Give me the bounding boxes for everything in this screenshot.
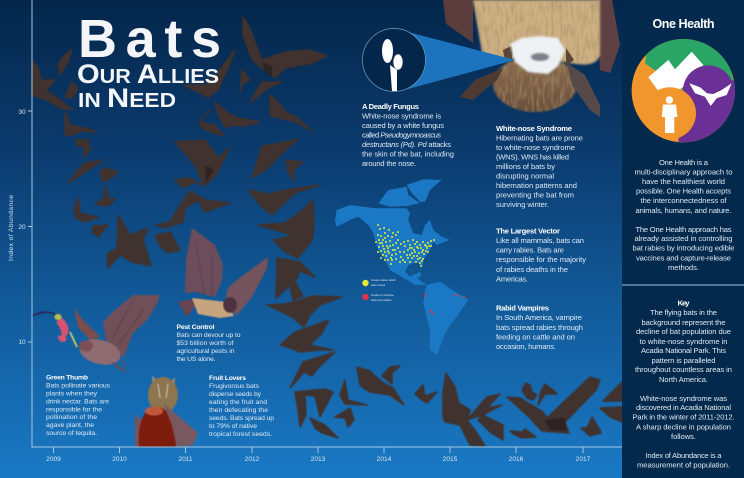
- text: Green Thumb: pollination of the: [46, 414, 97, 421]
- text: One Health description: vaccines and capture-release: [636, 254, 731, 262]
- callout cone to the nose: [408, 32, 515, 89]
- panel: One Health and Key sidebar: [622, 0, 744, 478]
- text: A Deadly Fungus: called Pseudogymnoascus: [362, 130, 441, 140]
- text: One Health description: bat rabies by introducing edible: [632, 244, 734, 252]
- text: Key: follows.: [671, 432, 696, 441]
- text: One Health description: possible. One Health accepts: [636, 186, 731, 196]
- bat: pest control bat: [178, 228, 268, 318]
- red rabies sites: [425, 294, 465, 314]
- flying bats population pattern: [32, 17, 622, 446]
- text: Green Thumb: responsible for the: [46, 406, 102, 414]
- text: Rabid Vampires: Rabid Vampires: [496, 304, 549, 312]
- text: Fruit Lovers: seeds. Bats spread up: [209, 415, 274, 422]
- text: One Health description: have the healthiest world: [642, 177, 725, 186]
- text: Rabid Vampires: feeding on cattle and on: [496, 332, 575, 342]
- x axis year labels: 2011: [178, 456, 193, 463]
- x axis year labels: 2016: [509, 456, 524, 463]
- text: One Health description: methods.: [668, 263, 699, 272]
- text: White-nose Syndrome: Hibernating bats are prone: [496, 134, 583, 142]
- y axis labels: [8, 109, 26, 346]
- title: [77, 9, 221, 113]
- text: Fruit Lovers: eating the fruit and: [209, 399, 267, 406]
- text: Pest Control: [176, 324, 241, 363]
- x axis year labels: 2014: [377, 456, 392, 463]
- map legend: [362, 278, 396, 302]
- text: Fruit Lovers: then defecating the: [209, 407, 268, 414]
- text: One Health description: multi-disciplinary approach to: [634, 168, 732, 176]
- x axis year labels: 2012: [245, 456, 260, 463]
- text: Key: North America.: [659, 375, 708, 384]
- y axis labels: 30: [18, 109, 26, 116]
- text: A Deadly Fungus: destructans (Pd). Pd attacks: [362, 140, 451, 149]
- text: White-nose Syndrome: (WNS). WNS has killed: [496, 152, 569, 162]
- text: White-nose Syndrome: hibernation patterns and: [496, 181, 577, 190]
- text: Fruit Lovers: tropical forest seeds.: [209, 431, 272, 438]
- text: A Deadly Fungus: around the nose.: [362, 159, 416, 168]
- text: Green Thumb: plants when they: [46, 390, 98, 398]
- text: Fruit Lovers: Fruit Lovers: [209, 375, 246, 382]
- text: Green Thumb: source of tequila.: [46, 430, 97, 437]
- text: Key: Key: [678, 298, 690, 308]
- text: Key: Park in the winter of 2011-2012.: [632, 412, 734, 422]
- icon: One Health circle: [632, 39, 735, 142]
- y axis labels: Index of Abundance: [8, 195, 15, 261]
- text: The Largest Vector: carry rabies. Bats are: [496, 246, 564, 254]
- text: A Deadly Fungus: A Deadly Fungus: [362, 102, 419, 111]
- map legend: bats and rabies: [371, 298, 392, 302]
- text: Green Thumb: [46, 374, 111, 437]
- text: One Health description: the interconnectedness of: [640, 196, 727, 205]
- text: Key: to white-nose syndrome in: [640, 337, 728, 346]
- text: Key: pattern is paralleled: [652, 356, 716, 365]
- title: IN NEED: [78, 83, 176, 113]
- text: One Health description: animals, humans, and nature.: [636, 206, 732, 215]
- text: A Deadly Fungus: White-nose syndrome is: [362, 112, 441, 120]
- x axis year labels: 2013: [311, 456, 326, 463]
- text: Key: A sharp decline in population: [636, 422, 731, 432]
- heading: One Health: One Health: [652, 17, 714, 31]
- text: Pest Control: Pest Control: [176, 324, 215, 331]
- text: Key: [632, 298, 734, 470]
- x axis year labels: 2009: [46, 456, 61, 463]
- text: White-nose Syndrome: preventing the bat from: [496, 190, 574, 200]
- text: Rabid Vampires: occasion, humans.: [496, 342, 556, 351]
- y axis labels: 20: [18, 224, 26, 231]
- map legend: Areas of vampire: [371, 293, 394, 297]
- text: Fruit Lovers: Frugivorous bats: [209, 383, 260, 390]
- title: OUR ALLIES: [77, 59, 219, 89]
- text: Key: Acadia National Park. This: [641, 346, 726, 355]
- large bat face with white nose: [443, 0, 620, 117]
- text: White-nose Syndrome: to white-nose syndrome: [496, 143, 575, 152]
- text: Pest Control: agricultural pests in: [176, 348, 235, 355]
- text: A Deadly Fungus: the skin of the bat, including: [362, 150, 454, 158]
- axes: [28, 0, 622, 453]
- x axis year labels: 2015: [443, 456, 458, 463]
- text: White-nose Syndrome: White-nose Syndrome: [496, 124, 572, 133]
- text: Key: throughout countless areas in: [635, 365, 732, 374]
- text: The Largest Vector: responsible for the majority: [496, 255, 586, 264]
- text: White-nose Syndrome: surviving winter.: [496, 200, 549, 209]
- text: Key: White-nose syndrome was: [640, 394, 727, 403]
- fungus spore icon: [362, 28, 426, 92]
- text: Key: The flying bats in the: [650, 308, 717, 317]
- text: Green Thumb: Green Thumb: [46, 374, 88, 382]
- text: Rabid Vampires: bats spread rabies through: [496, 323, 583, 332]
- text: Key: decline of bat population due: [636, 327, 731, 336]
- text: White-nose Syndrome: millions of bats by: [496, 162, 555, 171]
- text: One Health description: already assisted in controlling: [634, 234, 732, 243]
- map legend: Areas where rabid: [371, 278, 396, 282]
- text: Green Thumb: agave plant, the: [46, 422, 94, 429]
- text: Rabid Vampires: In South America, vampire: [496, 313, 582, 322]
- text: Fruit Lovers: to 79% of native: [209, 423, 257, 430]
- text: The Largest Vector: Like all mammals, bats can: [496, 236, 584, 245]
- text: The Largest Vector: of rabies deaths in the: [496, 265, 568, 274]
- text: Pest Control: the US alone.: [176, 356, 216, 363]
- x axis year labels: 2010: [112, 456, 127, 463]
- text: The Largest Vector: Americas.: [496, 274, 528, 284]
- yellow rabies sites: [376, 225, 434, 266]
- text: One Health description: [632, 158, 734, 272]
- text: A Deadly Fungus: [362, 102, 454, 168]
- text: Key: Index of Abundance is a: [646, 451, 722, 460]
- bat: nectar-feeding bat with flower: [32, 295, 159, 372]
- text: Fruit Lovers: disperse seeds by: [209, 391, 262, 398]
- bat: fruit bat holding a fruit: [135, 375, 198, 447]
- text: Green Thumb: Bats pollinate various: [46, 382, 111, 390]
- text: The Largest Vector: The Largest Vector: [496, 226, 560, 236]
- text: The Largest Vector: [496, 226, 586, 284]
- title: Bats: [78, 9, 221, 69]
- map of the Americas: [335, 179, 468, 355]
- text: Key: background represent the: [642, 318, 726, 327]
- y axis labels: 10: [18, 339, 26, 346]
- text: Rabid Vampires: [496, 304, 583, 351]
- map legend: bats found: [371, 283, 385, 287]
- text: Key: measurement of population.: [637, 460, 730, 470]
- text: Key: discovered in Acadia National: [636, 403, 731, 412]
- text: Pest Control: Bats can devour up to: [176, 332, 241, 339]
- text: A Deadly Fungus: caused by a white fungus: [362, 121, 444, 130]
- text: Pest Control: $53 billion worth of: [176, 340, 234, 347]
- x axis year labels: [46, 456, 591, 463]
- text: One Health description: The One Health approach has: [636, 225, 732, 234]
- x axis year labels: 2017: [576, 456, 591, 463]
- text: Green Thumb: drink nectar. Bats are: [46, 398, 109, 406]
- text: One Health description: One Health is a: [659, 158, 709, 167]
- text: White-nose Syndrome: disrupting normal: [496, 172, 554, 180]
- text: White-nose Syndrome: [496, 124, 583, 209]
- text: Fruit Lovers: [209, 375, 274, 438]
